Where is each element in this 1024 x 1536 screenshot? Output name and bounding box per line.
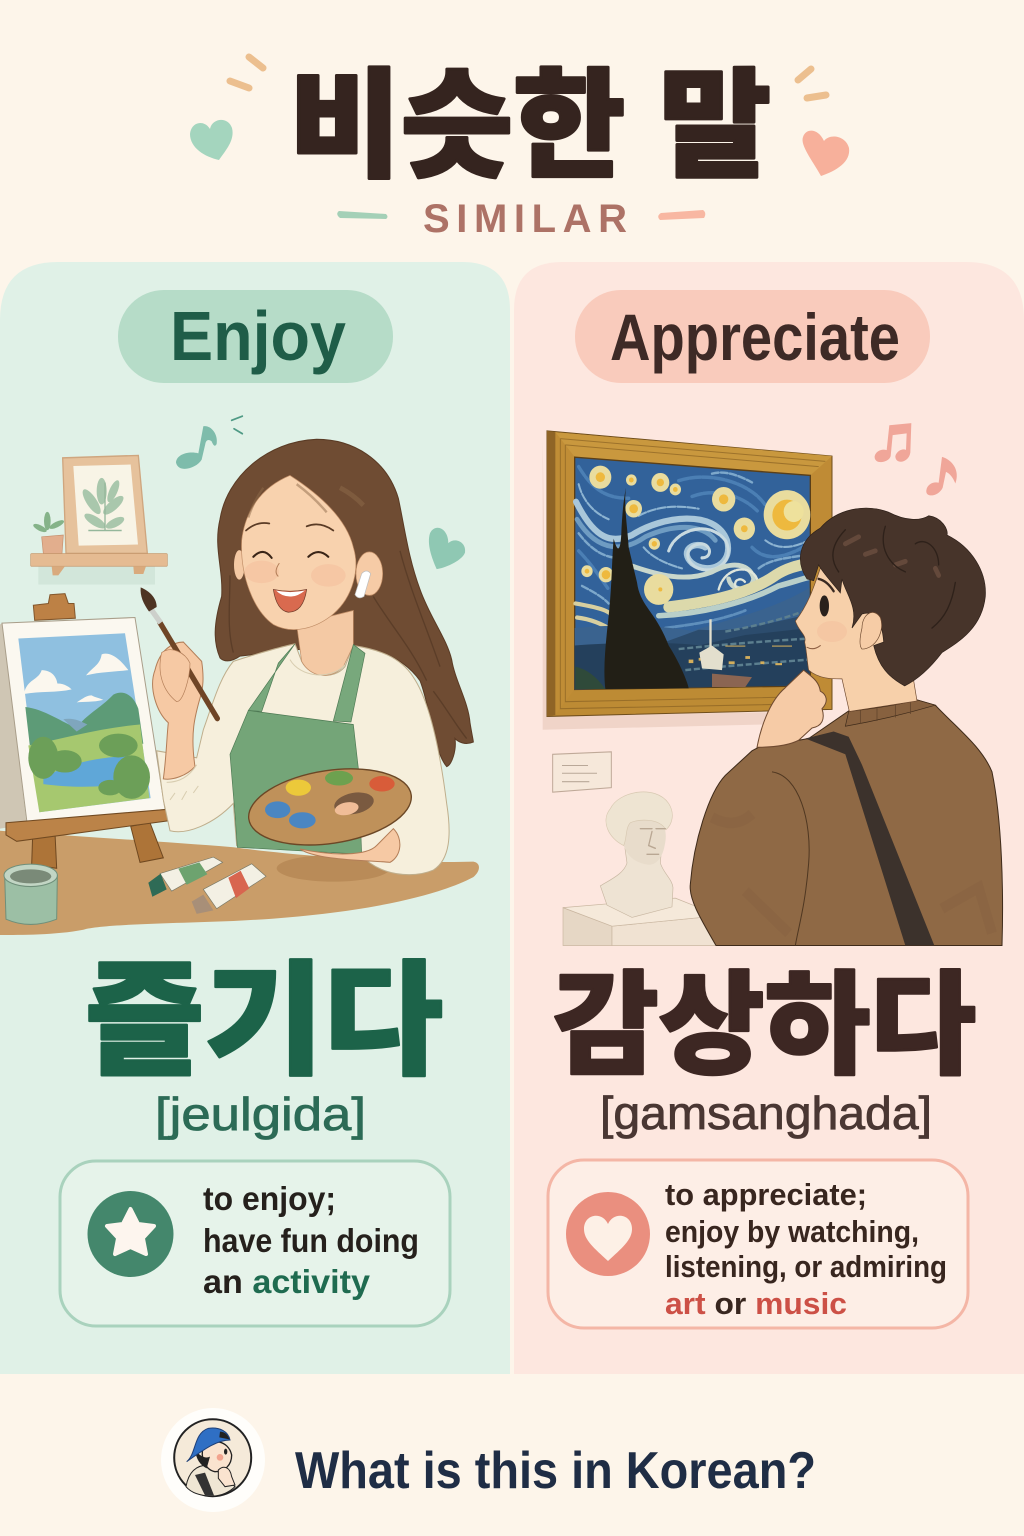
pill heading: Appreciate <box>575 290 930 383</box>
icon: peach heart <box>803 131 849 176</box>
definition text <box>665 1177 947 1321</box>
illustration: girl painting <box>0 416 479 935</box>
definition text: to enjoy; <box>203 1180 336 1217</box>
table <box>0 831 479 935</box>
panel: Enjoy <box>0 262 510 1374</box>
definition text: listening, or admiring <box>665 1249 947 1284</box>
marble bust <box>600 792 673 917</box>
pill heading: Enjoy: Enjoy <box>170 297 346 375</box>
definition box: enjoy <box>60 1161 450 1326</box>
cypress tree <box>604 488 689 689</box>
face <box>234 475 383 630</box>
icon: star badge <box>88 1191 174 1277</box>
swirling sky strokes <box>575 467 810 628</box>
title block <box>190 57 849 241</box>
Korean word: 감상하다: 감상하다 <box>553 963 976 1088</box>
framed starry night painting <box>543 431 832 730</box>
decoration: mint dash <box>337 211 388 219</box>
avatar badge <box>161 1408 265 1512</box>
panel: Appreciate <box>514 262 1024 1374</box>
definition text: art or music <box>665 1286 847 1321</box>
icon: teal heart <box>429 528 465 569</box>
curly hair <box>800 508 985 686</box>
subtitle: SIMILAR: SIMILAR <box>423 197 627 241</box>
decoration: right sparks <box>798 69 826 98</box>
bag strap <box>805 732 934 945</box>
neck <box>297 610 353 675</box>
illustration: boy viewing painting <box>543 423 1003 945</box>
definition text: have fun doing <box>203 1222 419 1259</box>
easel and canvas <box>0 594 175 868</box>
hair strands <box>229 551 467 739</box>
stars and moon <box>581 466 810 605</box>
definition text: to appreciate; <box>665 1177 867 1212</box>
definition text <box>203 1180 419 1300</box>
neck and face <box>795 551 917 712</box>
back hair <box>215 439 473 767</box>
pill heading: Enjoy <box>118 290 393 383</box>
definition box: appreciate <box>548 1160 968 1328</box>
icon: music notes <box>875 423 957 495</box>
apron <box>230 644 365 854</box>
definition text: enjoy by watching, <box>665 1214 919 1249</box>
sweater <box>157 644 449 875</box>
Korean word: 즐기다: 즐기다 <box>85 953 443 1091</box>
paint tubes <box>148 857 266 914</box>
title: Korean heading: 비슷한 말 <box>289 61 771 193</box>
right hand under palette <box>300 829 400 862</box>
definition text: an activity <box>203 1263 371 1300</box>
ear <box>860 612 882 649</box>
footer question: What is this in Korean? <box>295 1442 816 1500</box>
decoration: left sparks <box>230 57 263 88</box>
decoration: peach dash <box>658 210 705 220</box>
icon: music note and sparks <box>176 416 242 469</box>
left hand holding brush <box>141 587 217 779</box>
icon: heart badge <box>566 1192 650 1276</box>
palette <box>244 759 416 855</box>
hair highlights and curls <box>833 526 955 628</box>
romanization: jeulgida: [jeulgida] <box>155 1088 366 1140</box>
glass jar <box>4 864 57 924</box>
sweater cuffs and knit detail <box>167 660 345 800</box>
hand on chin <box>757 670 826 747</box>
pedestal <box>563 898 720 945</box>
sweater details <box>712 700 992 945</box>
icon: mint heart <box>190 120 233 160</box>
pill heading: Appreciate: Appreciate <box>610 300 900 374</box>
shelf with frame and plant <box>31 455 167 585</box>
footer <box>161 1408 816 1512</box>
romanization: gamsanghada: [gamsanghada] <box>600 1087 932 1139</box>
hills and village <box>575 588 810 689</box>
sweater back <box>690 700 1003 945</box>
placard <box>553 752 611 792</box>
